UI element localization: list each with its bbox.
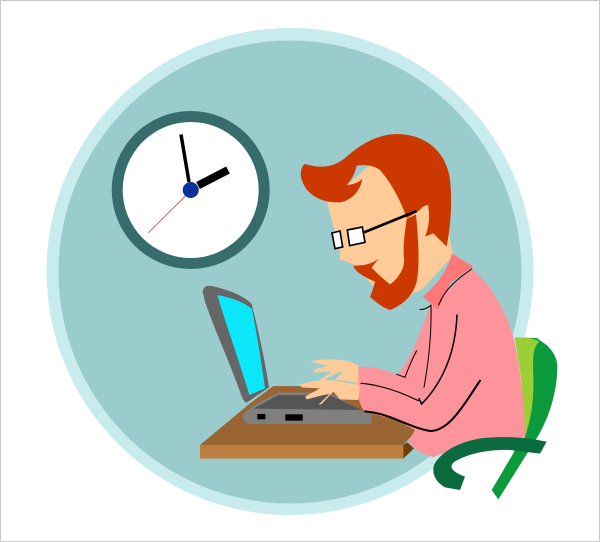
man: shirt: [357, 253, 525, 457]
desk: [200, 386, 420, 459]
man: hands: [300, 359, 360, 405]
man: glasses: [332, 211, 417, 249]
laptop: [203, 286, 372, 424]
man: hair: [301, 134, 451, 247]
chair: [492, 337, 557, 499]
man: beard and ear: [353, 205, 429, 310]
icon: wall clock: [112, 111, 270, 269]
man: neck and face: [327, 162, 453, 305]
chair armrest: [433, 437, 547, 490]
background circle: [46, 28, 534, 515]
